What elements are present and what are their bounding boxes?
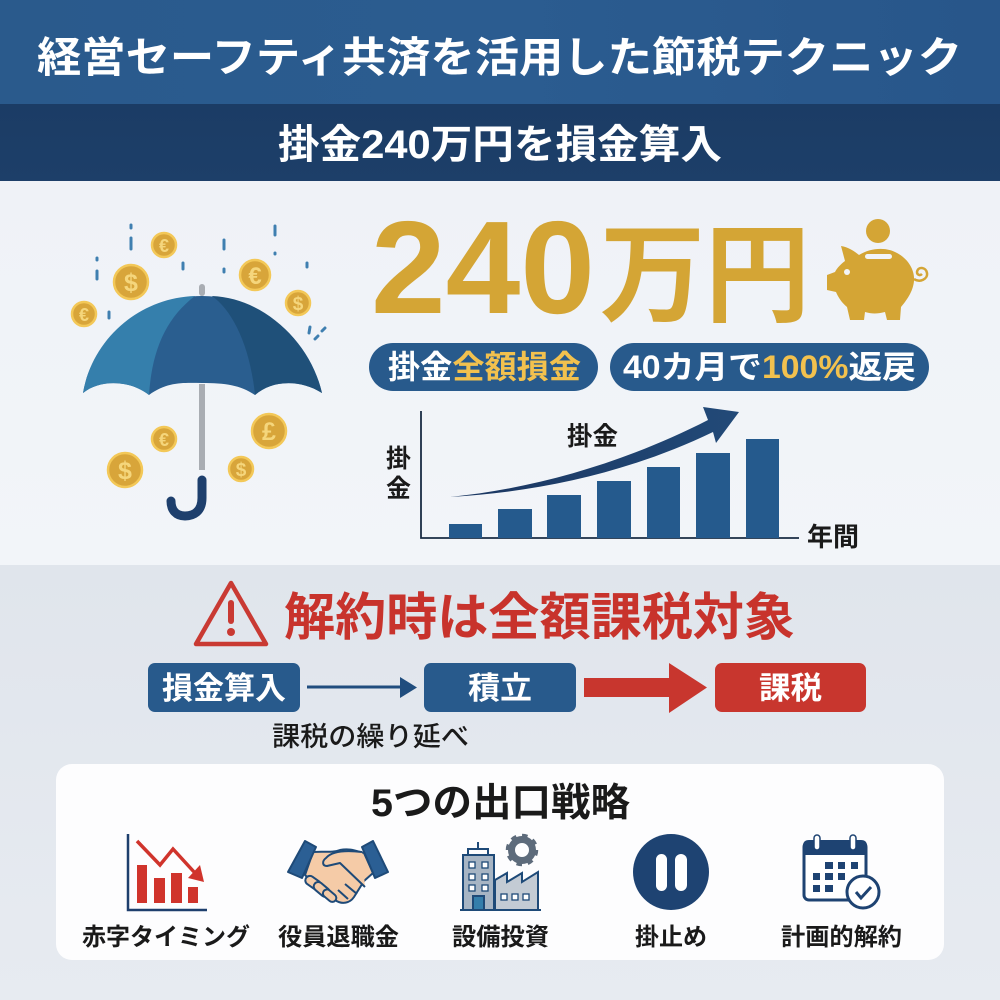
flow: accumulation box: 積立: [468, 671, 532, 706]
strategy: planned cancellation: 計画的解約: [781, 924, 902, 951]
strategy: executive retirement: 役員退職金: [278, 924, 399, 951]
panel: exit strategies: [56, 764, 944, 960]
icon: falling chart: [128, 834, 207, 910]
x axis label: 年間: [807, 522, 859, 552]
strategy: planned cancellation: [781, 835, 902, 951]
icon: umbrella with falling coins: [72, 225, 325, 516]
big amount: 万円: [600, 215, 810, 336]
icon: umbrella with falling coins: $: [124, 269, 138, 297]
icon: pause button: [633, 834, 709, 910]
icon: warning triangle: [196, 583, 266, 644]
big amount: [371, 194, 810, 341]
icon: calendar with check: [803, 835, 879, 908]
strategy: equipment investment: [452, 836, 549, 951]
strategy: suspension: [633, 834, 709, 951]
pole: [199, 284, 205, 296]
icon: umbrella with falling coins: €: [248, 263, 262, 290]
chart bars: [449, 439, 779, 538]
arrow: thin blue: [307, 677, 417, 698]
flow: deduction box: 損金算入: [162, 671, 286, 706]
strategy: equipment investment: 設備投資: [452, 924, 549, 951]
strategy: suspension: 掛止め: [635, 924, 707, 951]
pill: refund: 40カ月で100%返戻: [623, 349, 916, 385]
subtitle banner: 掛金240万円を損金算入: [278, 123, 722, 167]
arrow: thick red: [584, 663, 707, 713]
strategy: deficit timing: 赤字タイミング: [82, 923, 250, 951]
icon: umbrella with falling coins: $: [293, 294, 304, 315]
warning heading: 解約時は全額課税対象: [284, 589, 795, 646]
y axis label: 掛: [386, 445, 411, 473]
y axis label: 金: [386, 475, 411, 503]
panel heading: 5つの出口戦略: [371, 782, 630, 825]
flow: deduction box: [148, 663, 300, 712]
title banner: [0, 0, 1000, 104]
flow: taxation box: [715, 663, 866, 712]
strategy: deficit timing: [82, 834, 250, 951]
icon: building and factory: [460, 836, 541, 910]
pill: full deduction: [369, 343, 598, 391]
pill: full deduction: 掛金全額損金: [388, 349, 581, 385]
coins: [72, 233, 310, 487]
icon: handshake: [288, 841, 388, 904]
flow caption: 課税の繰り延べ: [272, 722, 469, 752]
bar chart: [386, 407, 859, 552]
icon: umbrella with falling coins: €: [159, 430, 169, 450]
icon: umbrella with falling coins: €: [159, 236, 169, 256]
icon: umbrella with falling coins: €: [79, 305, 89, 325]
strategy: executive retirement: [278, 841, 399, 951]
icon: piggy bank: [827, 219, 927, 320]
rain drops: [97, 225, 325, 339]
chart label: contribution: 掛金: [567, 423, 618, 451]
flow: taxation box: 課税: [759, 671, 822, 706]
subtitle banner: [0, 104, 1000, 181]
trend arrow: [450, 407, 739, 497]
flow: accumulation box: [424, 663, 576, 712]
title banner: 経営セーフティ共済を活用した節税テクニック: [37, 34, 962, 81]
handle: [171, 480, 202, 516]
icon: umbrella with falling coins: £: [262, 418, 276, 446]
big amount: 240: [371, 194, 595, 341]
pill: refund: [610, 343, 929, 391]
canopy: [83, 296, 322, 395]
icon: umbrella with falling coins: $: [236, 460, 247, 481]
icon: umbrella with falling coins: $: [118, 457, 132, 485]
chart axes: [421, 411, 799, 538]
